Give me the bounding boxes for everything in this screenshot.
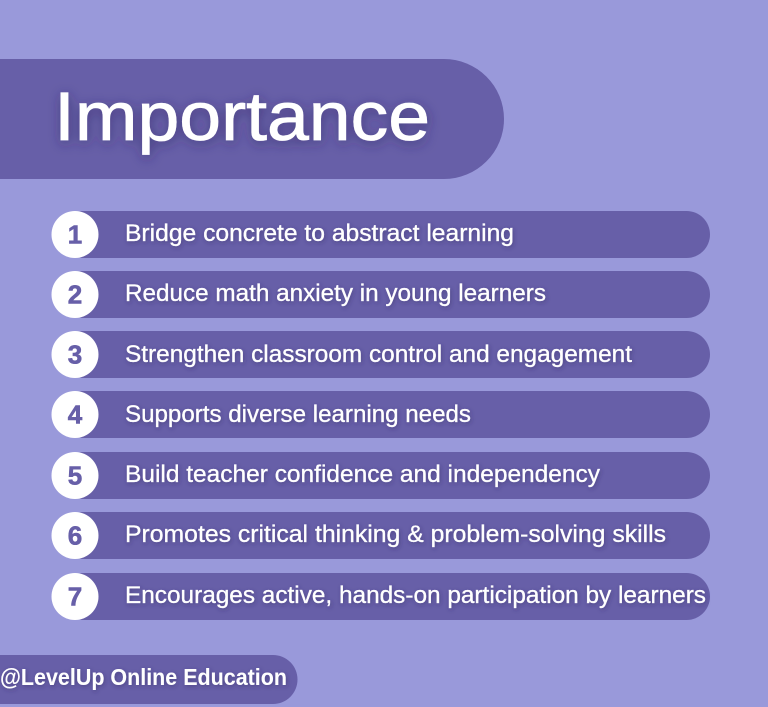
list item 6: 6 — [68, 520, 82, 550]
list item 6: Promotes critical thinking & problem-solving skills — [125, 521, 666, 548]
list item 1: Bridge concrete to abstract learning — [125, 220, 514, 247]
list item 7: Encourages active, hands-on participation by learners — [125, 582, 706, 609]
list item 1: 1 — [68, 220, 82, 250]
title: Importance — [54, 78, 430, 155]
list item 4 — [52, 391, 710, 438]
list item 3: Strengthen classroom control and engagement — [125, 341, 632, 368]
title banner — [0, 59, 504, 179]
list item 2: 2 — [68, 280, 82, 310]
list item 1 — [52, 211, 710, 258]
list item 5 — [52, 452, 710, 499]
list item 4: 4 — [68, 400, 83, 430]
list item 2: Reduce math anxiety in young learners — [125, 280, 546, 307]
list item 2 — [52, 271, 710, 318]
list item 3: 3 — [68, 340, 82, 370]
list item 7: 7 — [68, 582, 82, 612]
list item 5: 5 — [68, 460, 82, 490]
list item 4: Supports diverse learning needs — [125, 401, 471, 428]
list item 6 — [52, 512, 710, 559]
footer credit pill — [0, 655, 298, 704]
list item 5: Build teacher confidence and independency — [125, 461, 600, 488]
list item 3 — [52, 331, 710, 378]
list item 7 — [52, 573, 710, 620]
footer credit pill: @LevelUp Online Education — [0, 664, 287, 690]
